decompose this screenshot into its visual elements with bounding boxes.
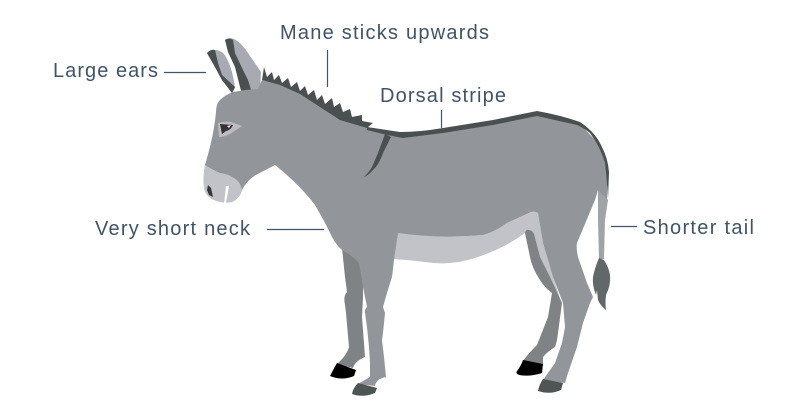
label: large ears: Large ears [53, 60, 158, 82]
far hind hoof [516, 360, 543, 376]
rear ear [207, 50, 235, 93]
nostril [207, 185, 213, 197]
label: very short neck: Very short neck [95, 218, 251, 240]
donkey body [204, 80, 607, 386]
mouth line [224, 186, 229, 203]
near hind hoof [538, 379, 563, 393]
label: dorsal stripe [380, 85, 506, 128]
mane [262, 67, 373, 130]
tail tuft [593, 258, 610, 310]
shoulder stripe [364, 134, 391, 177]
tail [593, 190, 610, 310]
muzzle [204, 165, 242, 203]
belly patch [393, 212, 562, 304]
dorsal stripe [367, 111, 609, 200]
near fore hoof [352, 383, 377, 396]
label: mane sticks upwards: Mane sticks upwards [280, 22, 489, 44]
far foreleg [330, 248, 365, 378]
far fore hoof [330, 363, 356, 378]
front ear [225, 38, 261, 96]
eye [218, 122, 242, 137]
label: dorsal stripe: Dorsal stripe [380, 85, 506, 107]
far hind leg [516, 230, 562, 376]
label: shorter tail: Shorter tail [643, 217, 754, 239]
